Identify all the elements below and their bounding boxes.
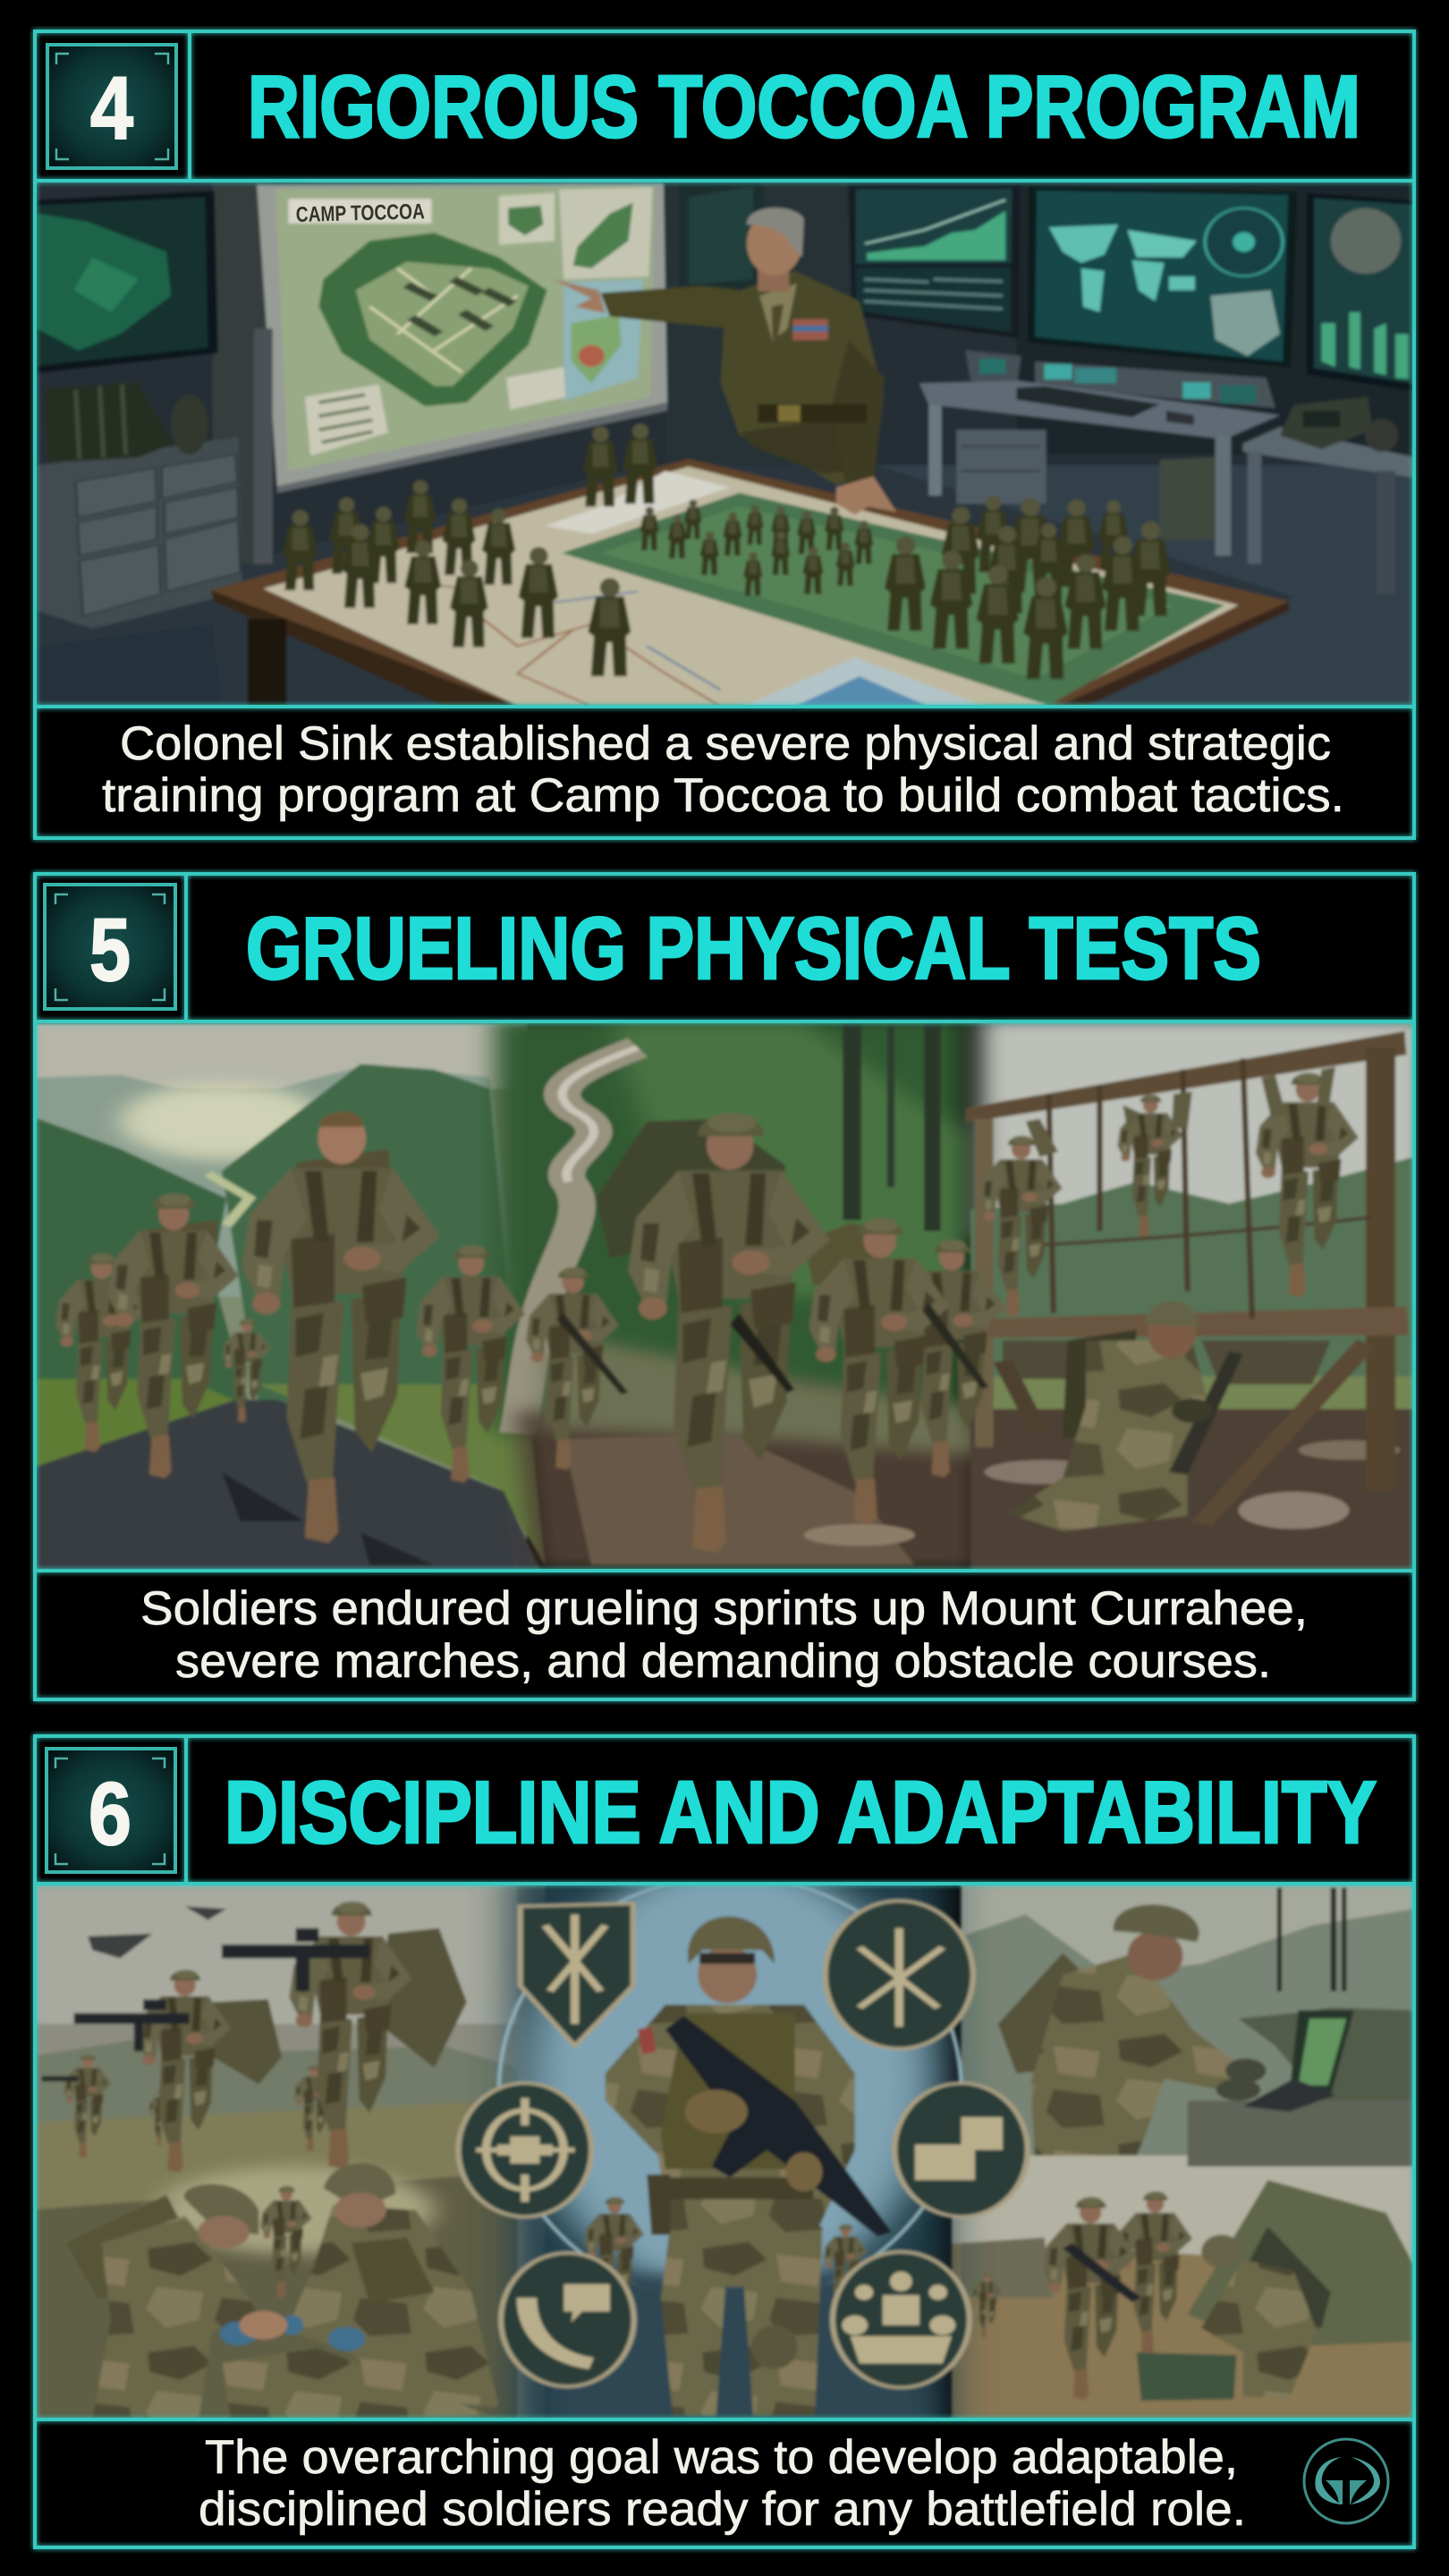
world map monitor <box>1028 186 1298 368</box>
centre glow <box>513 1870 947 2440</box>
panel: rigorous Toccoa program <box>30 26 1419 843</box>
number badge: 5 <box>89 900 131 999</box>
panel frame <box>35 1736 1414 2547</box>
wall map board <box>257 183 667 487</box>
central soldier <box>661 2226 823 2416</box>
illustration: soldier roles and skill icons <box>28 1860 1423 2440</box>
chart monitor <box>848 184 1021 338</box>
left soldiers <box>88 1934 152 1958</box>
caption: Colonel Sink established a severe physical and strategic <box>120 717 1331 770</box>
number badge <box>47 1749 175 1872</box>
miniature soldiers <box>583 427 618 506</box>
panel: discipline and adaptability <box>30 1731 1419 2553</box>
number badge <box>47 45 176 168</box>
right background <box>961 1882 1423 2172</box>
table <box>211 459 1289 707</box>
caption: severe marches, and demanding obstacle courses. <box>175 1635 1271 1688</box>
right: sky, trees, mud <box>979 1018 1432 1236</box>
desks <box>928 402 942 496</box>
colonel <box>721 271 884 485</box>
climbers <box>979 1136 1063 1317</box>
cabinet and binders <box>37 437 242 629</box>
left: sky and mountains <box>179 1088 529 1541</box>
number badge: 6 <box>89 1764 131 1863</box>
caption: Soldiers endured grueling sprints up Mount Currahee, <box>140 1582 1308 1635</box>
runners <box>55 1253 147 1452</box>
caption: training program at Camp Toccoa to build combat tactics. <box>102 769 1344 822</box>
caption: disciplined soldiers ready for any battlefield role. <box>199 2483 1246 2536</box>
panel: grueling physical tests <box>30 869 1419 1705</box>
illustration: colonel at training table <box>28 181 1423 712</box>
right: tent and crew <box>1188 2180 1414 2347</box>
left battlefield background <box>28 1882 546 2429</box>
crawler <box>1063 1330 1137 1439</box>
number badge <box>45 885 175 1009</box>
caption: The overarching goal was to develop adaptable, <box>205 2431 1238 2484</box>
right monitor <box>1307 193 1419 392</box>
medics and casualty <box>260 2186 312 2298</box>
obstacle frame <box>966 1031 1406 1123</box>
illustration: soldiers running and obstacle course <box>28 1018 1432 1571</box>
icon: logo emblem <box>1304 2439 1388 2523</box>
caption <box>199 2431 1246 2536</box>
right: radio operator <box>998 1953 1090 2073</box>
panel frame <box>35 31 1414 838</box>
centre: forest and muddy trail <box>495 1018 966 1434</box>
background screen behind colonel <box>679 183 764 290</box>
map label: CAMP TOCCOA <box>295 199 425 227</box>
caption <box>102 717 1344 822</box>
left wall monitor <box>35 191 218 374</box>
panel frame <box>35 874 1414 1699</box>
caption <box>140 1582 1308 1688</box>
skill icons <box>458 1901 1028 2387</box>
number badge: 4 <box>90 58 133 157</box>
